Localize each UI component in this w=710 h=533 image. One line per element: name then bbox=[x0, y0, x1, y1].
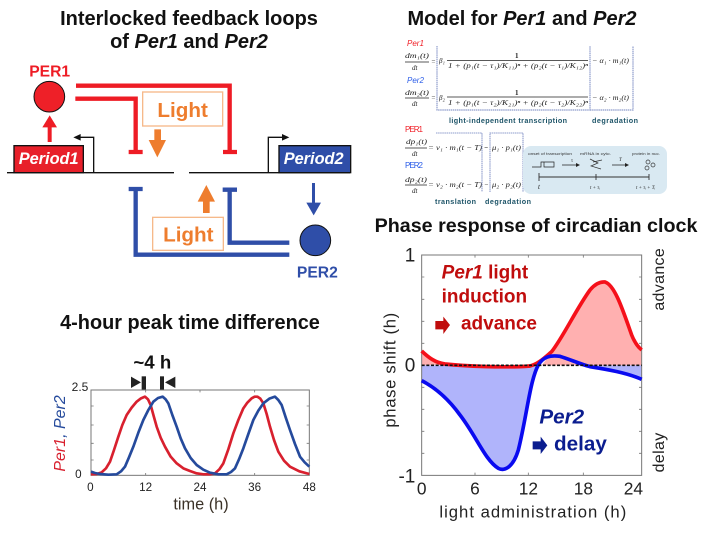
schematic: time delays: t + τᵢ + Tᵢ bbox=[636, 186, 656, 191]
equation: Per2: dm₂(t) bbox=[405, 89, 430, 97]
equation: Per1: 1 bbox=[515, 52, 519, 60]
bracket: degradation bbox=[490, 133, 523, 192]
DNA line left bbox=[7, 171, 174, 175]
title: model: Model for Per1 and Per2 bbox=[408, 8, 636, 30]
x ticks bbox=[417, 478, 643, 498]
equation: Per1: 1 + (p₁(t − τ₁)/K₁₁)ⁿ + (p₂(t − τ₁)/K₁₂)ⁿ bbox=[448, 62, 589, 70]
equation: Per1: dt bbox=[412, 64, 418, 72]
icon: PER1 circle bbox=[34, 81, 65, 112]
label: Per1: Per1 bbox=[407, 39, 424, 48]
arrow: Period1 to PER1 bbox=[42, 115, 57, 142]
area: Per2 delay bbox=[422, 365, 642, 469]
DNA line right bbox=[189, 171, 350, 175]
callout: Light bottom: Light bbox=[163, 224, 214, 247]
promoter arrow: Period1 bbox=[73, 134, 94, 173]
y ticks: 1 bbox=[405, 245, 415, 266]
text: Per1 light induction: induction bbox=[442, 286, 527, 307]
curve: Per2 bbox=[91, 397, 309, 475]
text: delay: delay bbox=[554, 433, 607, 456]
label: light-independent transcription: light-independent transcription bbox=[449, 116, 567, 125]
x ticks: 0 bbox=[417, 478, 426, 498]
x axis label: time (h) bbox=[173, 495, 229, 513]
text: advance: advance bbox=[461, 313, 537, 334]
x ticks: 6 bbox=[470, 478, 480, 498]
curve: Per2 bbox=[422, 356, 642, 469]
inhibition: PER2 outer bbox=[129, 189, 289, 255]
inhibition: PER1 inner bbox=[75, 99, 143, 152]
schematic: time delays bbox=[523, 146, 667, 194]
bracket: degradation bbox=[590, 46, 633, 110]
x ticks: 36 bbox=[248, 481, 261, 494]
curve: Per1 bbox=[91, 397, 309, 474]
equation: PER2: = v₂ · m₂(t − T) bbox=[428, 181, 483, 189]
arrow: Period2 to PER2 bbox=[306, 183, 321, 215]
y axis label: phase shift (h) bbox=[380, 312, 399, 428]
equation: PER1 bbox=[405, 138, 522, 158]
plot frame bbox=[91, 390, 309, 475]
equation: Per2: β₂ bbox=[438, 94, 445, 102]
title: peak time difference: 4-hour peak time difference bbox=[60, 312, 320, 334]
label: PER2: PER2 bbox=[297, 264, 338, 281]
equation: Per1 bbox=[405, 52, 630, 72]
equation: PER1: = v₁ · m₁(t − T) bbox=[428, 144, 483, 152]
arrow: light down bbox=[149, 129, 166, 157]
marker: left peak bbox=[131, 376, 146, 392]
x ticks: 18 bbox=[574, 478, 593, 498]
title: phase response: Phase response of circadian clock bbox=[375, 215, 697, 237]
text: Per2: Per2 bbox=[539, 405, 585, 428]
equation: Per1: dm₁(t) bbox=[405, 52, 430, 60]
equation: PER1: dt bbox=[412, 150, 418, 158]
callout: Light bottom bbox=[153, 217, 223, 250]
label: delay: delay bbox=[651, 432, 668, 472]
equation: PER1: μ₁ · p₁(t) bbox=[492, 144, 522, 152]
equation: Per1: β₁ bbox=[438, 57, 445, 65]
equation: PER1: − bbox=[484, 144, 488, 152]
gene: Period2: Period2 bbox=[284, 150, 344, 168]
label: degradation: degradation bbox=[485, 197, 531, 206]
title: interlocked feedback loops: Interlocked feedback loops bbox=[60, 8, 318, 30]
icon: blue arrow bbox=[533, 437, 547, 454]
zero line bbox=[422, 363, 642, 368]
curve: Per1 bbox=[422, 282, 642, 367]
y tick: 0: 0 bbox=[75, 468, 82, 481]
schematic: time delays: t + τᵢ bbox=[590, 186, 600, 191]
y axis label: Per1, Per2 bbox=[52, 395, 69, 472]
area: Per1 advance bbox=[422, 282, 642, 365]
inhibition: PER1 outer bbox=[76, 86, 237, 152]
x ticks: 48 bbox=[303, 481, 316, 494]
x ticks: 12 bbox=[139, 481, 152, 494]
arrow: light up bbox=[198, 185, 215, 213]
chart: phase response bbox=[380, 245, 668, 522]
label: translation: translation bbox=[435, 197, 476, 206]
y tick: 2.5: 2.5 bbox=[72, 380, 89, 394]
callout: Light top bbox=[143, 92, 223, 126]
label: ~4 h: ~4 h bbox=[133, 351, 171, 372]
panel: model equations mRNA bbox=[405, 39, 638, 125]
label: PER1: PER1 bbox=[29, 63, 70, 80]
equation: Per2: = bbox=[431, 94, 436, 102]
equation: Per2: dt bbox=[412, 100, 418, 108]
equation: Per1: − α₁ · m₁(t) bbox=[592, 57, 630, 65]
chart: peak time difference bbox=[52, 351, 316, 513]
y ticks bbox=[398, 245, 415, 487]
label: PER2: PER2 bbox=[405, 161, 424, 170]
y ticks: 0 bbox=[405, 356, 415, 377]
promoter arrow: Period2 bbox=[268, 134, 289, 173]
equation: PER2: − bbox=[484, 181, 489, 189]
gene: Period1: Period1 bbox=[19, 150, 79, 168]
icon: red arrow bbox=[435, 317, 450, 334]
x ticks bbox=[87, 481, 316, 494]
x axis label: light administration (h) bbox=[439, 503, 627, 522]
gene: Period1 bbox=[14, 146, 83, 173]
bracket: transcription bbox=[437, 46, 590, 110]
equation: Per2: 1 + (p₁(t − τ₂)/K₂₁)ⁿ + (p₂(t − τ₂)/K₂₂)ⁿ bbox=[448, 99, 589, 107]
bracket: translation bbox=[436, 133, 482, 192]
callout: Light top: Light bbox=[157, 99, 208, 122]
equation: Per1: = bbox=[431, 58, 436, 66]
y ticks: -1 bbox=[398, 466, 415, 487]
panel: feedback loop diagram bbox=[7, 63, 351, 281]
icon: PER2 circle bbox=[300, 225, 331, 256]
schematic: time delays: t bbox=[538, 183, 541, 191]
panel: model equations protein bbox=[405, 125, 667, 206]
plot frame bbox=[422, 255, 642, 475]
gene: Period2 bbox=[279, 146, 351, 173]
equation: Per2: − α₂ · m₂(t) bbox=[592, 94, 630, 102]
schematic: time delays: T bbox=[619, 158, 623, 163]
text: Per1 light induction: light bbox=[483, 262, 529, 283]
equation: PER2: μ₂ · p₂(t) bbox=[492, 181, 522, 189]
equation: PER1: dp₁(t) bbox=[406, 138, 428, 146]
marker: right peak bbox=[160, 376, 175, 392]
label: PER1: PER1 bbox=[405, 125, 424, 134]
x ticks: 24 bbox=[624, 478, 643, 498]
equation: Per2 bbox=[405, 89, 630, 108]
inhibition: PER2 inner bbox=[223, 190, 289, 243]
schematic: time delays: protein in nuc. bbox=[632, 152, 660, 156]
equation: PER2: dt bbox=[412, 187, 418, 195]
text: Per1 light induction: Per1 bbox=[442, 262, 483, 283]
schematic: time delays: τ bbox=[571, 159, 573, 164]
x ticks: 0 bbox=[87, 481, 94, 494]
title: interlocked feedback loops: of Per1 and Per2 bbox=[110, 31, 268, 53]
x ticks: 24 bbox=[194, 481, 207, 494]
schematic: time delays: mRNA in cyto. bbox=[580, 152, 611, 156]
equation: PER2 bbox=[405, 176, 522, 195]
x ticks: 12 bbox=[519, 478, 538, 498]
equation: Per2: 1 bbox=[515, 89, 519, 97]
label: Per2: Per2 bbox=[407, 76, 424, 85]
schematic: time delays: onset of transcription bbox=[528, 152, 572, 156]
label: degradation: degradation bbox=[592, 116, 638, 125]
equation: PER2: dp₂(t) bbox=[405, 176, 428, 184]
label: advance: advance bbox=[651, 248, 668, 311]
